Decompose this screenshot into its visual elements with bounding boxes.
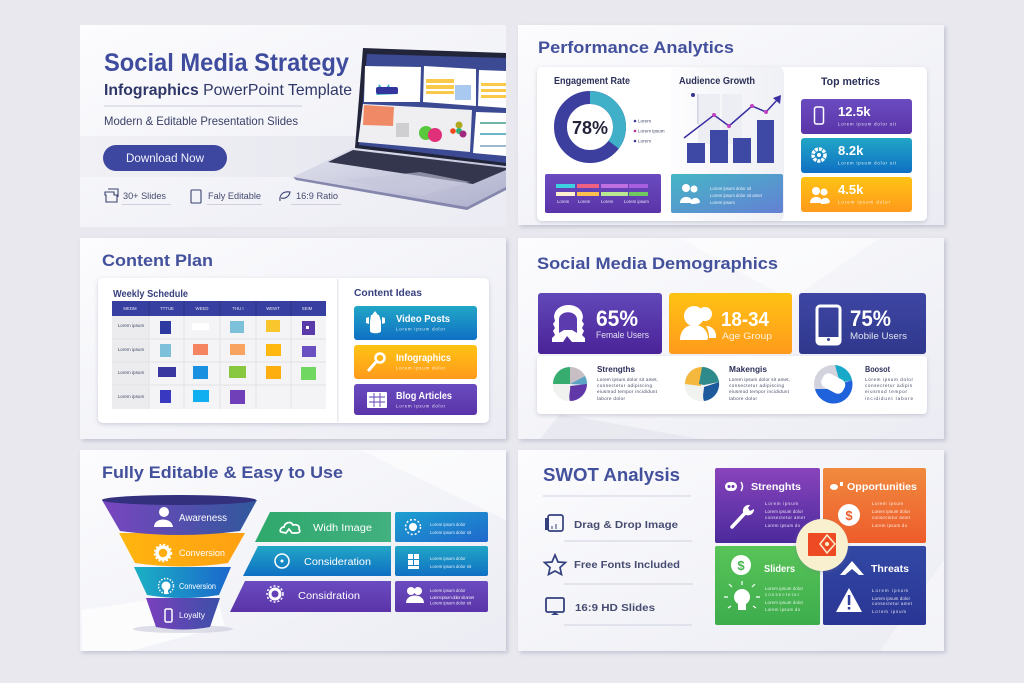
card: teal note: Lorem ipsum dolor sit amet [710, 193, 763, 198]
feature: free fonts: Free Fonts Included [574, 559, 680, 571]
note: second detail [395, 546, 488, 576]
metric: 8.2k [801, 138, 912, 173]
button: download now: Download Now [126, 153, 205, 165]
text: marketing: Lorem ipsum dolor sit amet, [729, 377, 790, 382]
chart: pie strengths [552, 366, 588, 402]
text: tagline: Modern & Editable Presentation Slides [104, 114, 298, 128]
table: weekly schedule: WEED [196, 306, 208, 311]
funnel layer: conversion lower [134, 567, 231, 598]
note: third detail: Lorem ipsum dolor [430, 588, 466, 593]
panel: fully editable [80, 450, 506, 651]
heading: weekly schedule: Weekly Schedule [113, 288, 188, 300]
panel: performance analytics [518, 25, 944, 225]
feature: ratio: 16:9 Ratio [296, 191, 338, 202]
text: marketing: Makengis [729, 365, 768, 374]
quadrant: sliders: Lorem ipsum dolor [765, 600, 804, 605]
table: weekly schedule: Lorem ipsum [118, 347, 144, 352]
quadrant: opportunities [823, 468, 926, 543]
feature: drag and drop [545, 515, 692, 542]
card: blog articles [354, 384, 477, 415]
quadrant: sliders: Lorem ipsum do [765, 607, 801, 612]
legend: donut: Lorem ipsum [638, 128, 665, 134]
card: teal note: Lorem ipsum [710, 200, 735, 205]
text: marketing [729, 365, 790, 401]
text: boost: eiusmod tempor [865, 389, 907, 394]
quadrant: sliders: $ [737, 558, 745, 573]
quadrant: opportunities: Opportunities [847, 482, 917, 493]
note: first detail [395, 512, 488, 542]
text: strengths: labore dolor [597, 396, 625, 401]
stat: female users [538, 293, 662, 354]
funnel layer: conversion lower: Conversion [179, 581, 216, 591]
text: strengths [597, 365, 658, 401]
funnel layer: loyalty [146, 598, 220, 630]
note: second detail: Lorem ipsum dolor [430, 556, 466, 561]
text: boost: Boosot [865, 365, 890, 374]
quadrant: opportunities: consectetur amet [872, 515, 911, 520]
stat: age group: 18-34 [721, 309, 770, 331]
icon: laptop [293, 48, 506, 210]
heading: swot analysis: SWOT Analysis [543, 464, 680, 485]
metric: 12.5k: 12.5k [838, 104, 871, 119]
card: blog articles: Lorem ipsum dolor [396, 404, 446, 408]
card: blog articles: Blog Articles [396, 391, 452, 402]
feature: ratio [280, 191, 341, 205]
heading: fully editable: Fully Editable & Easy to Use [102, 463, 343, 482]
table: weekly schedule: SEIM [302, 306, 313, 311]
metric: 4.5k [801, 177, 912, 212]
card: video posts: Video Posts [396, 314, 450, 325]
card: infographics: Infographics [396, 353, 451, 364]
feature: slides count [105, 189, 171, 205]
card: demographic breakdown [537, 356, 927, 414]
bar: widh image: Widh Image [313, 523, 372, 534]
feature: hd slides: 16:9 HD Slides [575, 602, 655, 614]
quadrant: opportunities: Lorem ipsum do [872, 523, 908, 528]
quadrant: threats: Lorem ipsum [872, 609, 906, 614]
card: purple bars: Lorem [578, 199, 591, 204]
quadrant: threats: consectetur amet [872, 601, 913, 606]
quadrant: sliders [715, 546, 820, 625]
table: weekly schedule [112, 301, 326, 409]
icon: center badge [796, 519, 848, 571]
heading: engagement rate: Engagement Rate [554, 76, 630, 87]
text: marketing: eiusmod tempor incididunt [729, 389, 790, 394]
button: download now [103, 145, 227, 171]
feature: drag and drop: Drag & Drop Image [574, 519, 678, 531]
note: first detail: Lorem ipsum dolor sit [430, 530, 472, 535]
panel: social media demographics [518, 238, 944, 439]
stat: female users: 65% [596, 306, 638, 331]
text: strengths: Lorem ipsum dolor sit amet, [597, 377, 658, 382]
table: weekly schedule: THU I [232, 306, 244, 311]
table: weekly schedule: Lorem ipsum [118, 323, 144, 328]
panel: content plan [80, 238, 506, 439]
funnel layer: conversion upper: Conversion [179, 548, 225, 559]
card: teal note [671, 174, 783, 213]
heading: audience growth: Audience Growth [679, 76, 755, 87]
note: second detail: Lorem ipsum dolor sit [430, 564, 472, 569]
heading: top metrics: Top metrics [821, 76, 880, 88]
stat: age group [669, 293, 792, 354]
heading: content plan: Content Plan [102, 251, 213, 270]
table: weekly schedule: Lorem ipsum [118, 370, 144, 375]
heading: hero title: Social Media Strategy [104, 49, 349, 77]
funnel layer: conversion upper [119, 533, 245, 566]
metric: 12.5k: Lorem ipsum dolor sit [838, 122, 897, 126]
stat: female users: Female Users [596, 330, 649, 341]
quadrant: threats: Threats [871, 564, 909, 575]
quadrant: strengths: Strenghts [751, 482, 801, 493]
quadrant: sliders: Sliders [764, 564, 795, 575]
stat: age group: Age Group [722, 331, 772, 342]
bar: considration: Considration [298, 591, 360, 602]
quadrant: sliders: consectetur [765, 592, 800, 597]
metric: 8.2k: Lorem ipsum dolor sit [838, 160, 897, 166]
metric: 8.2k: 8.2k [838, 143, 864, 158]
panel: hero [80, 25, 506, 227]
card: teal note: Lorem ipsum dolor sit [710, 186, 752, 191]
quadrant: strengths: Lorem ipsum dolor [765, 509, 804, 514]
quadrant: threats: Lorem ipsum [872, 588, 908, 593]
stat: mobile users: 75% [850, 306, 891, 331]
table: weekly schedule: Lorem ipsum [118, 394, 144, 399]
chart: funnel [102, 495, 257, 633]
quadrant: strengths: consectetur amet [765, 515, 806, 520]
metric: 4.5k: 4.5k [838, 182, 864, 197]
metric: 4.5k: Lorem ipsum dolor [838, 200, 891, 204]
text: strengths: eiusmod tempor incididunt [597, 389, 658, 394]
feature: free fonts [544, 555, 693, 584]
chart: audience growth [684, 93, 781, 163]
quadrant: threats: Lorem ipsum dolor [872, 596, 911, 601]
quadrant: threats [823, 546, 926, 625]
text: strengths: Strengths [597, 365, 636, 374]
legend: donut [634, 118, 665, 144]
bar: consideration [243, 546, 391, 576]
panel: swot [518, 450, 944, 651]
bar: considration [230, 581, 391, 612]
chart: pie marketing [684, 366, 720, 402]
chart: ring boost [814, 365, 853, 404]
text: boost: Lorem ipsum dolor [865, 377, 913, 382]
legend: donut: Lorem [638, 138, 651, 144]
legend: donut: Lorem [638, 118, 651, 124]
bar: widh image [255, 512, 391, 542]
funnel layer: awareness: Awareness [179, 513, 227, 524]
card: purple bars: Lorem [601, 199, 614, 204]
quadrant: strengths: Lorem ipsum [765, 501, 798, 506]
note: third detail [395, 581, 488, 612]
text: boost: consectetur adipis [865, 383, 913, 388]
note: third detail: Lorem ipsum dolor sit [430, 600, 472, 606]
bar: consideration: Consideration [304, 557, 371, 568]
card: video posts: Lorem ipsum dolor [396, 326, 446, 332]
heading: performance analytics: Performance Analytics [538, 38, 734, 57]
text: marketing: labore dolor [729, 396, 757, 401]
chart: donut 78% [560, 98, 620, 156]
text: strengths: consectetur adipiscing [597, 383, 652, 388]
quadrant: opportunities: Lorem ipsum [872, 501, 903, 506]
card: video posts [354, 306, 477, 340]
text: boost [865, 365, 913, 401]
feature: editable [191, 190, 262, 205]
quadrant: opportunities: Lorem ipsum dolor [872, 509, 911, 514]
note: third detail: Lorem ipsum dolor sit amet [430, 595, 475, 600]
quadrant: strengths [715, 468, 820, 543]
card: infographics: Lorem ipsum dolor [396, 366, 446, 370]
text: marketing: consectetur adipiscing [729, 383, 784, 388]
funnel layer: loyalty: Loyalty [179, 610, 206, 620]
table: weekly schedule: TTTUE [160, 306, 174, 311]
card: infographics [354, 345, 477, 379]
table: weekly schedule: WEWT [266, 306, 280, 311]
note: first detail: Lorem ipsum dolor [430, 522, 466, 527]
stat: mobile users [799, 293, 926, 354]
quadrant: strengths: Lorem ipsum do [765, 523, 801, 528]
heading: demographics: Social Media Demographics [537, 254, 778, 273]
card: purple bars: Lorem ipsum [624, 199, 649, 204]
heading: content ideas: Content Ideas [354, 287, 422, 299]
feature: editable: Faly Editable [208, 191, 261, 202]
funnel layer: awareness [102, 495, 257, 535]
quadrant: opportunities: $ [845, 508, 853, 523]
card: purple bars: Lorem [557, 199, 570, 204]
feature: slides count: 30+ Slides [123, 191, 166, 202]
metric: 12.5k [801, 99, 912, 134]
quadrant: sliders: Lorem ipsum dolor [765, 586, 804, 591]
text: boost: incididunt labore [865, 396, 913, 401]
chart: donut 78%: 78% [572, 118, 608, 138]
heading: hero subtitle: Infographics PowerPoint Template [104, 82, 352, 99]
card: purple bars [545, 174, 661, 213]
table: weekly schedule: MEDM [123, 306, 137, 311]
feature: hd slides [546, 598, 692, 626]
stat: mobile users: Mobile Users [850, 331, 907, 342]
